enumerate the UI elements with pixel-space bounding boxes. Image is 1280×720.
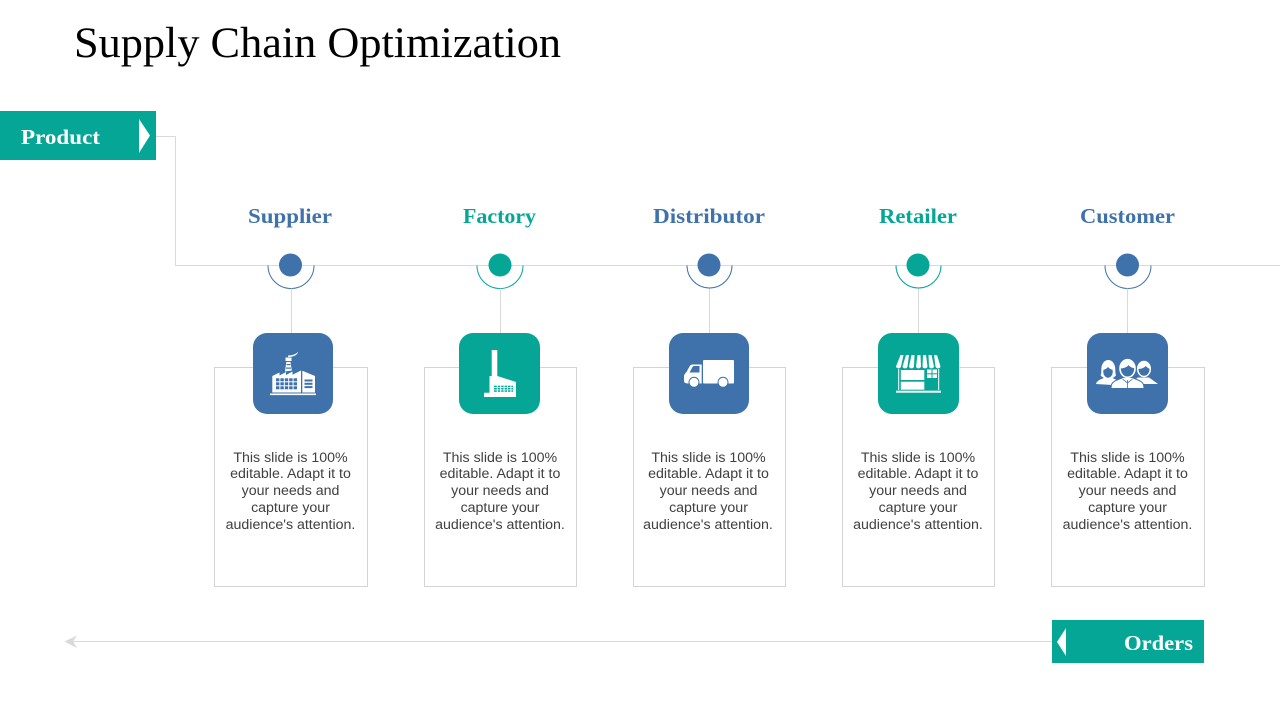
text: supplier: your needs and	[242, 483, 339, 499]
node: distributor	[687, 254, 732, 333]
icon: factory chimney	[459, 333, 540, 414]
text: factory: This slide is 100%	[443, 450, 558, 466]
connector: product to timeline	[156, 136, 1280, 266]
text: supplier: This slide is 100%	[233, 450, 348, 466]
icon: people	[1087, 333, 1168, 414]
icon: factory	[253, 333, 333, 414]
text: distributor: editable. Adapt it to	[648, 466, 769, 482]
column: distributor	[634, 204, 786, 586]
card: factory	[424, 368, 576, 586]
banner: orders: Orders	[1124, 631, 1193, 655]
card: supplier	[214, 368, 368, 586]
text: customer: audience's attention.	[1063, 517, 1192, 533]
column: customer	[1052, 204, 1204, 586]
text: distributor: This slide is 100%	[651, 450, 766, 466]
text: supplier: editable. Adapt it to	[230, 466, 351, 482]
text: factory: audience's attention.	[435, 517, 565, 533]
text: distributor: capture your	[669, 500, 748, 516]
node: supplier	[268, 254, 314, 333]
text: distributor: audience's attention.	[643, 517, 773, 533]
banner: product	[0, 111, 156, 160]
text: customer: editable. Adapt it to	[1067, 466, 1188, 482]
text: supplier: audience's attention.	[226, 517, 355, 533]
heading: factory: Factory	[463, 204, 537, 228]
card: retailer	[842, 368, 994, 586]
column: factory	[424, 204, 576, 586]
node: retailer	[896, 254, 941, 333]
banner: product: Product	[21, 125, 100, 149]
title: Supply Chain Optimization	[74, 20, 561, 67]
text: retailer: editable. Adapt it to	[858, 466, 978, 482]
person: woman	[1096, 360, 1119, 385]
banner: orders	[1052, 620, 1204, 663]
icon: storefront	[878, 333, 959, 414]
text: customer: This slide is 100%	[1070, 450, 1185, 466]
text: supplier: capture your	[251, 500, 330, 516]
text: retailer: audience's attention.	[853, 517, 983, 533]
text: customer: your needs and	[1079, 483, 1176, 499]
heading: supplier: Supplier	[248, 204, 332, 228]
person: man right	[1134, 361, 1158, 384]
text: retailer: your needs and	[869, 483, 967, 499]
icon: truck	[669, 333, 749, 414]
column: retailer	[842, 204, 994, 586]
heading: retailer: Retailer	[879, 204, 957, 228]
text: factory: capture your	[461, 500, 540, 516]
text: customer: capture your	[1088, 500, 1167, 516]
text: retailer: This slide is 100%	[861, 450, 976, 466]
node: factory	[477, 254, 523, 333]
text: distributor: your needs and	[660, 483, 757, 499]
arrow: orders flow	[64, 636, 1052, 648]
node: customer	[1105, 254, 1151, 333]
person: man centre	[1111, 359, 1144, 388]
text: factory: your needs and	[451, 483, 549, 499]
heading: customer: Customer	[1080, 204, 1175, 228]
heading: distributor: Distributor	[653, 204, 765, 228]
text: factory: editable. Adapt it to	[440, 466, 560, 482]
card: customer	[1052, 368, 1204, 586]
card: distributor	[634, 368, 786, 586]
column: supplier	[214, 204, 368, 586]
text: retailer: capture your	[879, 500, 958, 516]
